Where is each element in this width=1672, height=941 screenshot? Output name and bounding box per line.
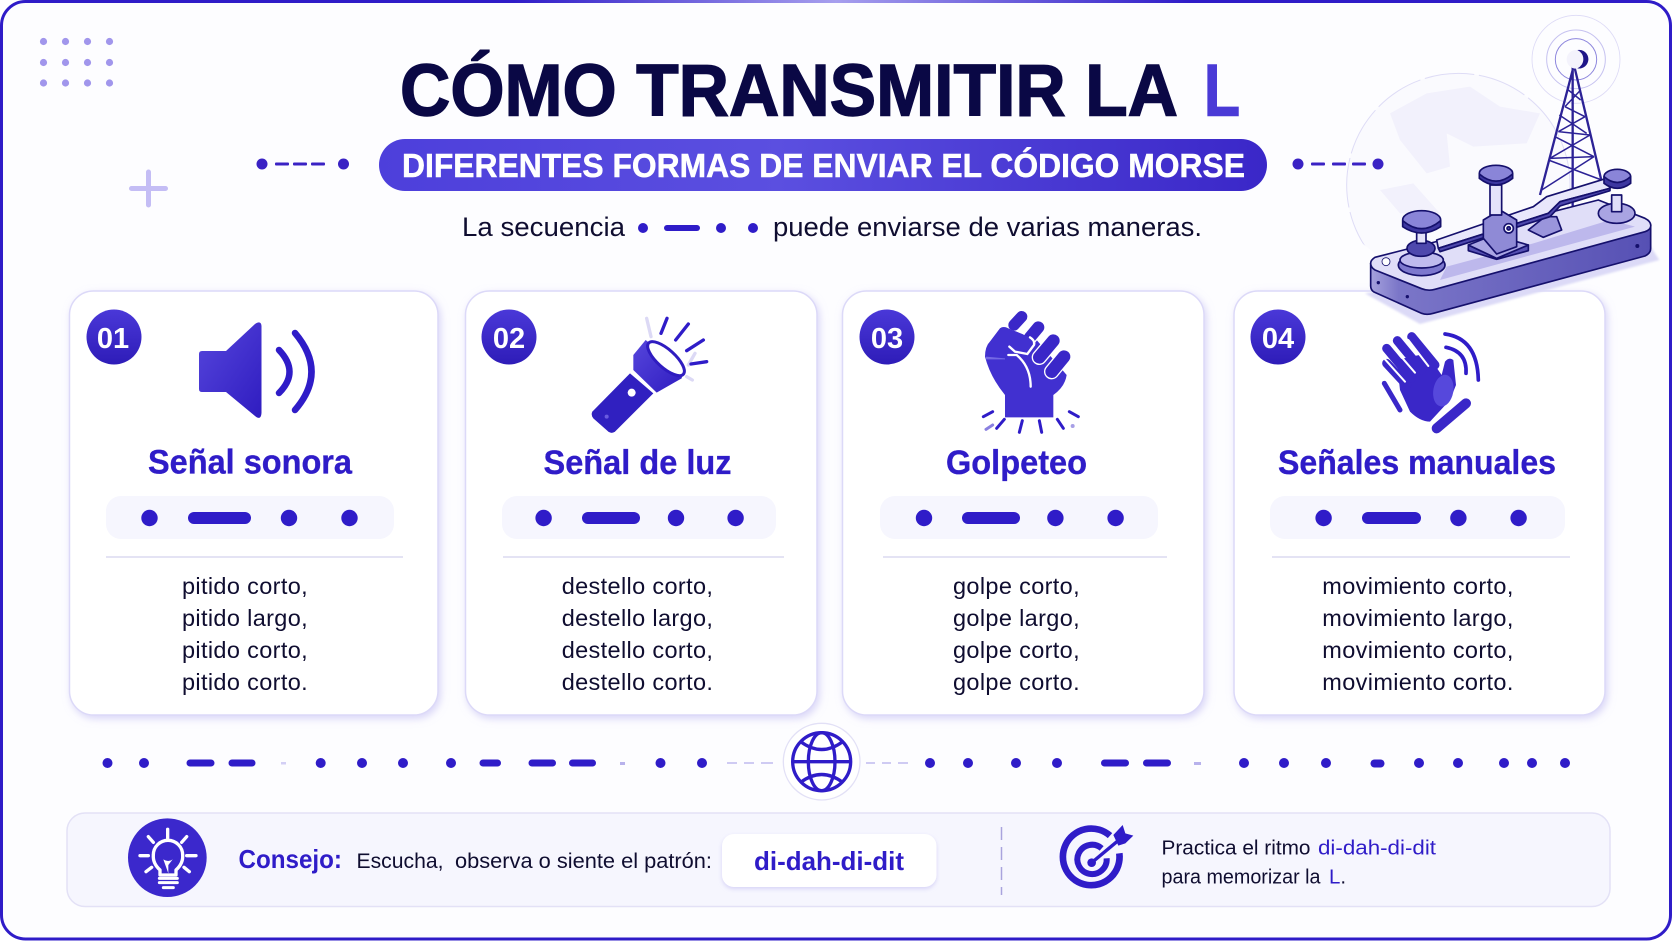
description: destello corto, [562,637,713,663]
sequence sentence: La secuencia [462,212,625,242]
badge 01 [86,310,142,364]
panel: tip: Escucha, [356,850,444,873]
description: golpe corto. [953,669,1080,695]
subtitle pill [379,139,1267,191]
heading: Señales manuales [1278,444,1556,482]
description: pitido corto, [182,637,308,663]
icon: speaker [199,322,312,418]
right morse connector [1292,158,1384,170]
badge 03: 03 [871,323,903,355]
decorative plus sign [132,172,166,205]
badge 04: 04 [1262,323,1294,355]
description: movimiento largo, [1322,605,1514,631]
description: pitido corto. [182,669,308,695]
morse pattern [880,496,1158,539]
practice text: Practica el ritmo [1162,836,1310,860]
morse pattern [106,496,394,539]
icon: light bulb [128,818,207,897]
icon: target [1063,825,1133,885]
pattern chip: di-dah-di-dit [754,846,904,876]
globe [1346,73,1570,246]
description: movimiento corto, [1322,637,1514,663]
panel: golpeteo [842,291,1204,715]
icon: waving hand [1384,334,1478,428]
practice text: di-dah-di-dit [1318,836,1436,860]
left morse connector [256,158,349,170]
decorative dot grid [40,38,113,87]
badge 04 [1250,310,1306,364]
decorative morse strip [102,758,1570,768]
practice text: L. [1329,866,1346,888]
illustration: telegraph key, globe and tower [1347,15,1659,324]
description: destello corto, [562,573,713,599]
description: golpe corto, [953,573,1080,599]
sequence sentence: puede enviarse de varias maneras. [773,212,1202,242]
badge 03 [860,310,914,364]
description: pitido corto, [182,573,308,599]
description: golpe largo, [953,605,1080,631]
tip text: Consejo: [238,844,342,874]
description: destello largo, [562,605,713,631]
icon: fist [983,317,1078,432]
panel: tip [67,813,1610,906]
icon: flashlight [592,318,707,433]
badge 02 [482,310,536,364]
heading: Golpeteo [946,444,1087,482]
key lever [1437,169,1635,252]
panel: señal de luz [466,291,817,715]
description: destello corto. [562,669,713,695]
key base [1365,200,1659,324]
description: movimiento corto. [1322,669,1514,695]
title: L [1204,50,1240,132]
title: CÓMO TRANSMITIR LA [400,50,1178,132]
panel: señales manuales [1234,291,1605,715]
sequence sentence [462,212,1202,242]
description: movimiento corto, [1322,573,1514,599]
practice text: para memorizar la [1162,866,1321,888]
description: pitido largo, [182,605,308,631]
panel: tip: observa o siente el patrón: [455,850,712,873]
icon: globe [783,723,860,800]
pattern chip [722,834,936,887]
morse pattern [1270,496,1565,539]
key middle knob [1468,165,1528,259]
morse pattern [502,496,776,539]
panel: señal sonora [70,291,438,715]
description: golpe corto, [953,637,1080,663]
heading: Señal sonora [148,444,353,482]
badge 01: 01 [97,323,129,355]
tower [1532,15,1620,207]
practice text [1162,836,1436,888]
heading: Señal de luz [544,444,732,482]
badge 02: 02 [493,323,525,355]
subtitle pill: DIFERENTES FORMAS DE ENVIAR EL CÓDIGO MORSE [402,147,1245,184]
key left knob [1398,211,1445,276]
